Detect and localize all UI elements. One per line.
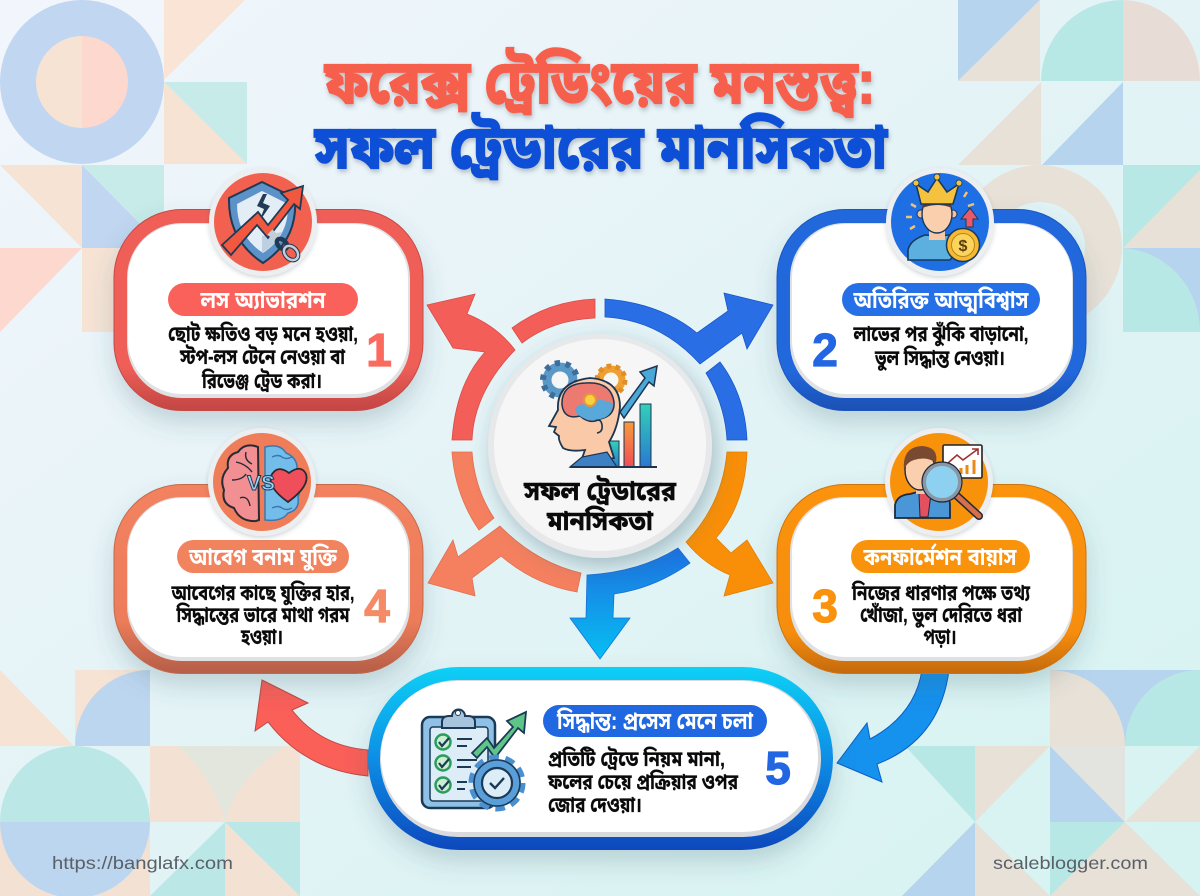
title line 2: সফল ট্রেডারের মানসিকতা [314, 113, 888, 181]
card 1 text: স্টপ-লস টেনে নেওয়া বা [179, 345, 346, 369]
card 4 heading [177, 540, 349, 573]
card 2 text: ভুল সিদ্ধান্ত নেওয়া। [874, 346, 1005, 371]
card 5 number: 5 [765, 742, 791, 794]
arrow: ring segment to card 2 [605, 293, 773, 364]
card 4 text: সিদ্ধান্তের ভারে মাথা গরম [176, 603, 350, 627]
card 1 number: 1 [366, 324, 392, 376]
card 4 frame [114, 484, 423, 674]
card 5 text: প্রতিটি ট্রেডে নিয়ম মানা, [548, 747, 725, 771]
card 3 text [851, 581, 1031, 649]
card 1 text: রিভেঞ্জ ট্রেড করা। [201, 369, 322, 393]
footer url left: https://banglafx.com [52, 853, 233, 873]
card 3 text: খোঁজা, ভুল দেরিতে ধরা [860, 603, 1023, 628]
card 3 number: 3 [812, 580, 838, 632]
icon: checklist with gear [422, 710, 526, 808]
card 5 frame [368, 667, 833, 850]
background pattern: bottom left [0, 670, 300, 896]
card 5 text: ফলের চেয়ে প্রক্রিয়ার ওপর [547, 770, 738, 794]
ring segment: red [512, 299, 595, 343]
icon badge 4: brain versus heart [208, 428, 316, 536]
arrow: ring segment to card 1 [427, 294, 515, 440]
card 1 heading: লস অ্যাভারশন [200, 287, 326, 314]
center label: সফল ট্রেডারের [523, 475, 677, 506]
arrow: card 5 to card 4 [255, 680, 368, 776]
icon badge 2: crowned trader with coin: $ [959, 238, 968, 255]
ring segment: blue [706, 362, 747, 440]
title line 1: ফরেক্স ট্রেডিংয়ের মনস্তত্ত্ব: [324, 48, 875, 117]
card 3 frame [777, 484, 1086, 674]
card 1 text: ছোট ক্ষতিও বড় মনে হওয়া, [168, 322, 358, 346]
card 4 number: 4 [364, 580, 390, 632]
center label: মানসিকতা [546, 505, 653, 536]
card 4 text: হওয়া। [240, 626, 283, 649]
card 2 number: 2 [812, 324, 838, 376]
arrow: ring segment to card 4 [428, 526, 581, 596]
card 1: loss aversion [114, 210, 423, 410]
card 1 text [168, 322, 358, 393]
card 2 text: লাভের পর ঝুঁকি বাড়ানো, [853, 322, 1028, 346]
card 2 text [853, 322, 1028, 371]
card 4 text: আবেগের কাছে যুক্তির হার, [171, 581, 354, 605]
card 4: emotion vs logic [114, 484, 423, 674]
card 5 text: জোর দেওয়া। [548, 794, 642, 817]
arrow: ring segment to card 3 [686, 452, 773, 596]
card 5: conclusion [368, 667, 833, 850]
center circle [488, 334, 712, 558]
arrow: ring segment to card 5 [570, 548, 690, 659]
background pattern: top left [0, 0, 247, 332]
icon: head with brain, gears and chart [543, 363, 657, 467]
card 3 heading: কনফার্মেশন বায়াস [863, 543, 1017, 571]
card 5 heading: সিদ্ধান্ত: প্রসেস মেনে চলা [556, 707, 754, 735]
ring segment: coral [452, 452, 494, 530]
card 2: overconfidence [777, 210, 1086, 410]
card 3: confirmation bias [777, 484, 1086, 674]
icon badge 2: crowned trader with coin [886, 168, 994, 276]
card 2 frame [777, 210, 1086, 410]
card 4 heading: আবেগ বনাম যুক্তি [188, 543, 337, 571]
card 3 text: নিজের ধারণার পক্ষে তথ্য [851, 581, 1031, 605]
card 2 heading: অতিরিক্ত আত্মবিশ্বাস [853, 286, 1029, 314]
card 1 frame [114, 210, 423, 410]
title [314, 48, 888, 181]
icon badge 3: analyst with magnifier [885, 428, 993, 536]
arrow: card 3 to card 5 [837, 670, 949, 782]
background pattern: top right [958, 0, 1200, 332]
icon badge 4: brain versus heart: VS [247, 472, 275, 495]
card 5 text [547, 747, 738, 817]
icon badge 1: broken shield and arrow [209, 168, 317, 276]
center label [523, 475, 677, 536]
footer url right: scaleblogger.com [993, 853, 1148, 873]
background pattern: bottom right [902, 670, 1200, 896]
card 4 text [171, 581, 354, 649]
card 3 text: পড়া। [924, 626, 956, 649]
card 1 heading [168, 283, 358, 316]
